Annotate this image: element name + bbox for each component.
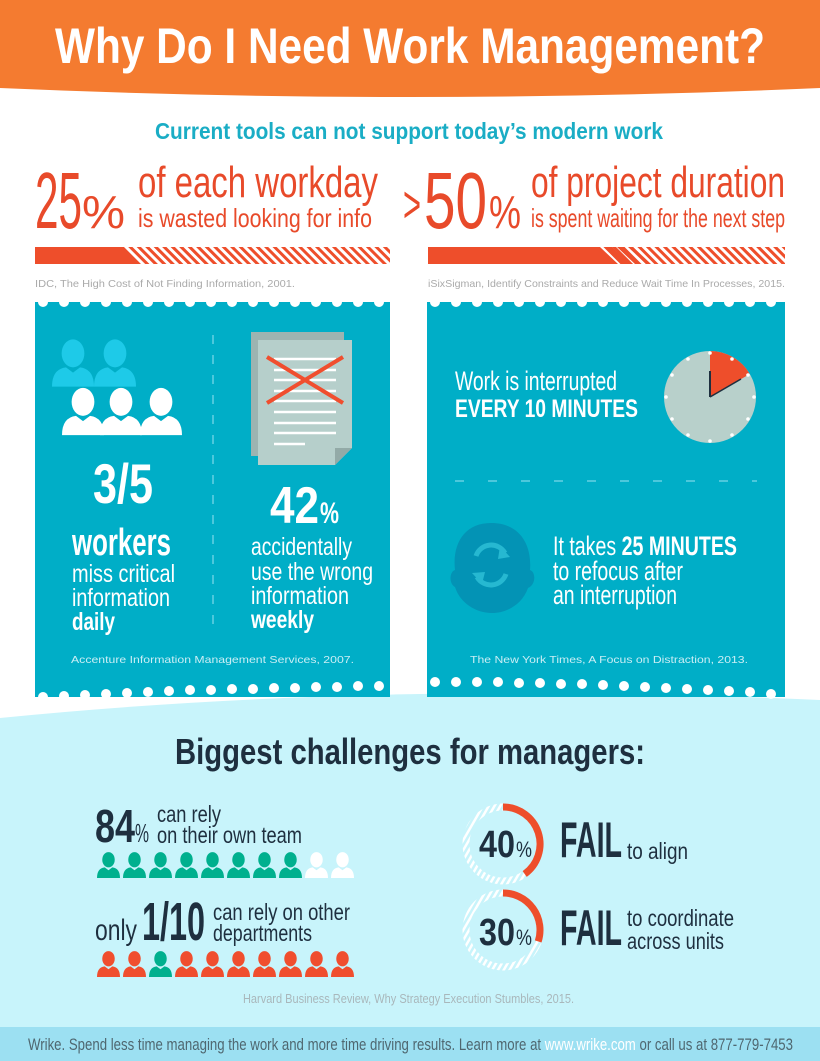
subtitle: Current tools can not support today’s modern work [155, 118, 663, 144]
text: 25 minutes to refocus [553, 531, 737, 610]
donut: 40% fail to align: 40 [479, 824, 515, 866]
stat: >50% of project duration: 50 [424, 156, 487, 245]
source: NYT: The New York Times, A Focus on Distraction, 2013. [470, 654, 748, 666]
stat: 84% rely on own team: on their own team [157, 822, 302, 848]
stat: only 1/10 rely on other departments: departments [213, 920, 312, 946]
donut: 40% fail to align: FAIL [560, 812, 622, 868]
donut: 30% fail to coordinate: across units [627, 928, 724, 954]
stat: 3/5 workers: miss critical [72, 560, 175, 588]
stat: 42% wrong info: use the wrong [251, 558, 373, 586]
stat: 84% rely on own team: 84 [95, 800, 135, 852]
stat: 42% wrong info: accidentally [251, 533, 352, 561]
bar: 50% [428, 247, 785, 264]
footer bar [0, 1027, 820, 1061]
icon: clock [664, 351, 756, 443]
stat: 84% rely on own team: can rely [157, 801, 221, 827]
text: 25 minutes to refocus: an interruption [553, 580, 677, 610]
donut: 30% fail to coordinate: % [516, 925, 532, 950]
icon: crossed document [251, 332, 352, 465]
panel: right interruptions [427, 297, 785, 699]
header banner [0, 0, 820, 97]
text: interrupted every 10 minutes: EVERY 10 MINUTES [455, 395, 638, 423]
stat: 3/5 workers: 3/5 [93, 452, 153, 515]
donut: 30% fail to coordinate: to coordinate [627, 905, 734, 931]
stat: 25% of each workday: % [82, 186, 125, 238]
bar: 25% [35, 247, 390, 264]
stat: only 1/10 rely on other departments: can rely on other [213, 899, 350, 925]
stat: 84% rely on own team [95, 800, 302, 852]
donut: 40% fail to align: to align [627, 838, 688, 864]
bottom light section background [0, 693, 820, 1061]
icon: group of workers [52, 339, 182, 435]
source texts top: iSixSigman, Identify Constraints and Reduce Wait Time In Processes, 2015. [428, 278, 785, 290]
footer bar: Wrike. Spend less time managing the work and more time driving results. Learn more at www.wrike.com or call us at 877-779-7453 [28, 1035, 793, 1054]
donut: 30% fail to coordinate: 30 [479, 912, 515, 954]
stat: 25% of each workday: is wasted looking for info [138, 203, 372, 233]
panel: left workers [35, 297, 390, 702]
stat: only 1/10 rely on other departments: 1/10 [142, 892, 205, 952]
donut: 30% fail to coordinate: FAIL [560, 900, 622, 956]
stat: 3/5 workers [71, 452, 175, 636]
donut: 40% fail to align [466, 807, 688, 881]
stat: >50% of project duration: % [489, 186, 521, 238]
donut: 30% fail to coordinate [466, 893, 734, 967]
stat: 3/5 workers: information [72, 584, 170, 612]
icon row: 8 of 10 teal [97, 852, 354, 878]
stat: only 1/10 rely on other departments [95, 892, 350, 952]
source texts top: IDC, The High Cost of Not Finding Information, 2001. [35, 278, 295, 290]
stat: only 1/10 rely on other departments: only [95, 914, 137, 947]
stat: 42% wrong info [250, 477, 373, 634]
stat: 3/5 workers: workers [71, 522, 171, 564]
heading: biggest challenges: Biggest challenges for managers: [175, 731, 645, 772]
stat: 25% of each workday: 25 [35, 156, 82, 245]
source: HBR: Harvard Business Review, Why Strategy Execution Stumbles, 2015. [243, 991, 574, 1006]
icon row: 1 of 10 teal [97, 951, 354, 977]
stat: 42% wrong info: 42 [270, 477, 319, 535]
stat: 25% of each workday: of each workday [138, 158, 378, 207]
stat: 3/5 workers: daily [72, 608, 115, 636]
icon: head with refocus arrows [450, 523, 534, 613]
source: Accenture: Accenture Information Management Services, 2007. [71, 654, 354, 666]
text: interrupted every 10 minutes: Work is interrupted [455, 366, 617, 396]
stat: >50% of project duration [403, 156, 785, 245]
text: 25 minutes to refocus: It takes 25 MINUTES [553, 531, 737, 561]
text: 25 minutes to refocus: to refocus after [553, 556, 683, 586]
donut: 40% fail to align: % [516, 837, 532, 862]
stat: 25% of each workday [35, 156, 378, 245]
stat: 84% rely on own team: % [135, 818, 149, 848]
source texts top [35, 278, 785, 290]
text: interrupted every 10 minutes [455, 366, 638, 423]
stat: 42% wrong info: information [251, 582, 349, 610]
stat: 42% wrong info: % [320, 497, 339, 530]
stat: 42% wrong info: weekly [250, 606, 314, 634]
stat: >50% of project duration: > [403, 176, 421, 234]
